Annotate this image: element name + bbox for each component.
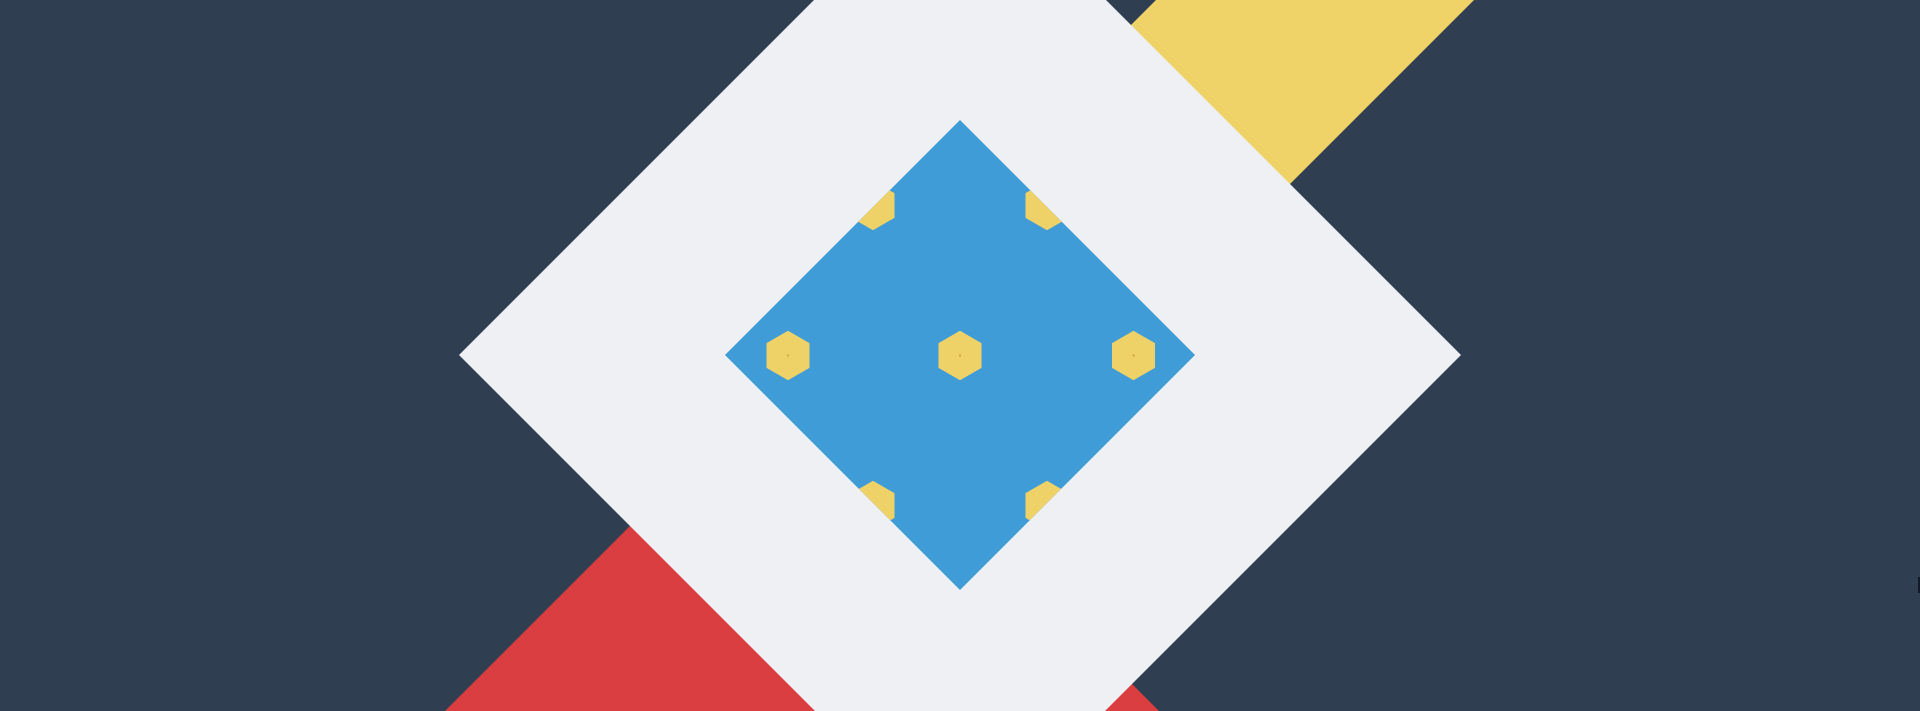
hexagon: middle left xyxy=(766,331,810,380)
yellow diagonal band xyxy=(1120,0,1474,194)
hexagon: lower right xyxy=(1026,480,1062,520)
graphic: geometric diamond composition xyxy=(445,0,1920,711)
hexagon pattern clipped to the blue diamond xyxy=(766,181,1155,530)
blue inner diamond xyxy=(725,120,1195,590)
hexagon: upper left xyxy=(858,190,894,230)
hexagon: lower left xyxy=(858,480,894,520)
hexagon: center xyxy=(938,331,982,380)
edge mark at right xyxy=(1918,577,1920,593)
red diagonal band xyxy=(445,516,1159,711)
hexagon: upper right xyxy=(1026,190,1062,230)
hexagon: middle right xyxy=(1112,331,1155,380)
white outer diamond xyxy=(459,0,1461,711)
